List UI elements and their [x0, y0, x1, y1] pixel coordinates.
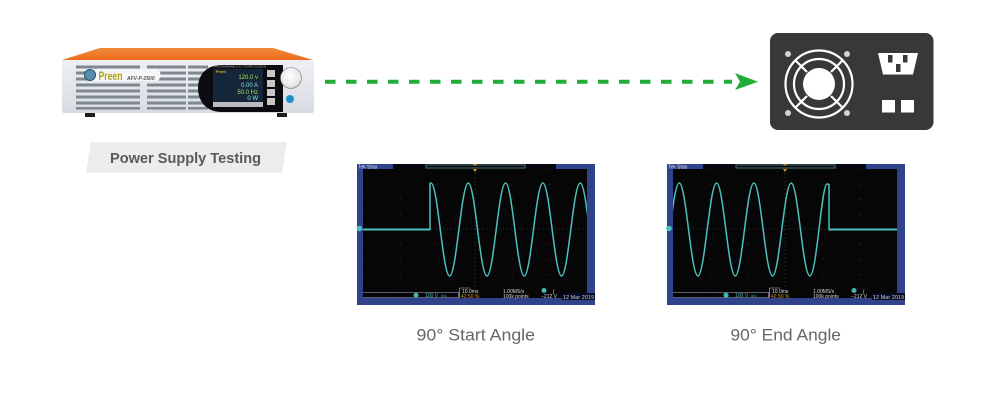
trigger marker [473, 169, 477, 172]
scope frame [667, 164, 905, 305]
status bar: 100 V [735, 293, 749, 299]
channel marker [357, 226, 362, 231]
brand plate: Preen [98, 71, 122, 83]
display screen: 0 W [247, 96, 258, 102]
status bar: 5/s [441, 293, 446, 298]
rotary knob [280, 68, 302, 88]
icon: power supply unit [770, 33, 934, 130]
scope plot area [673, 169, 897, 292]
label: power supply testing: Power Supply Testing [110, 150, 261, 167]
status bar [363, 288, 595, 301]
status bar: 12 Mar 2019 [563, 295, 594, 301]
scope top bar: Stop [367, 164, 378, 170]
device front panel [62, 60, 314, 113]
scope grid [673, 169, 897, 292]
green dashed arrow [325, 73, 758, 90]
status bar: 5/s [751, 293, 756, 298]
caption: start angle: 90° Start Angle [416, 326, 535, 344]
scope frame [357, 164, 595, 305]
display screen: 0.00 A [241, 83, 258, 89]
scope top bar: Tek [668, 164, 676, 170]
icon: fan [786, 50, 852, 118]
status bar: 100k points [503, 294, 529, 300]
waveform [673, 182, 830, 277]
label: power supply testing [86, 142, 287, 173]
status bar: ∫ [552, 289, 555, 295]
status bar: 100 V [425, 293, 439, 299]
channel marker [666, 226, 672, 231]
ventilation slots [76, 66, 208, 110]
panel title: PROGRAMMABLE AC POWER SOURCE [214, 64, 266, 68]
status bar: 10.0ms [462, 289, 479, 295]
device top cover [62, 48, 313, 60]
status bar: 42.50 % [771, 294, 790, 300]
status bar: 10.0ms [772, 289, 789, 295]
scope top bar [358, 164, 556, 170]
waveform [429, 182, 587, 277]
status bar [673, 288, 905, 301]
control panel [198, 65, 283, 112]
icon: switch squares [882, 100, 914, 112]
status bar: 1.00MS/s [503, 289, 525, 295]
brand plate: AFV-P-2500 [126, 76, 155, 82]
power supply device [62, 48, 314, 117]
icon: screws [785, 51, 850, 116]
oscilloscope: end angle [661, 164, 905, 305]
blue output button [286, 95, 294, 103]
scope top bar: Tek [358, 164, 366, 170]
status bar: −212 V [541, 294, 558, 300]
display screen: 50.0 Hz [237, 90, 258, 96]
scope top bar: Stop [677, 164, 688, 170]
caption: end angle: 90° End Angle [730, 326, 841, 344]
scope grid [363, 169, 587, 292]
display screen [213, 69, 263, 107]
device feet [85, 113, 287, 117]
display screen: 120.0 v [238, 75, 258, 81]
status bar: 12 Mar 2019 [873, 295, 904, 301]
scope plot area [363, 169, 587, 292]
scope top bar [668, 164, 866, 170]
oscilloscope: start angle [357, 164, 599, 305]
status bar: 1.00MS/s [813, 289, 835, 295]
brand plate [84, 69, 160, 83]
status bar: 42.50 % [461, 294, 480, 300]
panel buttons [267, 70, 275, 105]
status bar: −212 V [851, 294, 868, 300]
trigger marker [783, 169, 787, 172]
display screen: Preen [216, 70, 226, 74]
status bar: 100k points [813, 294, 839, 300]
status bar: ∫ [862, 289, 865, 295]
icon: power socket [878, 53, 918, 74]
